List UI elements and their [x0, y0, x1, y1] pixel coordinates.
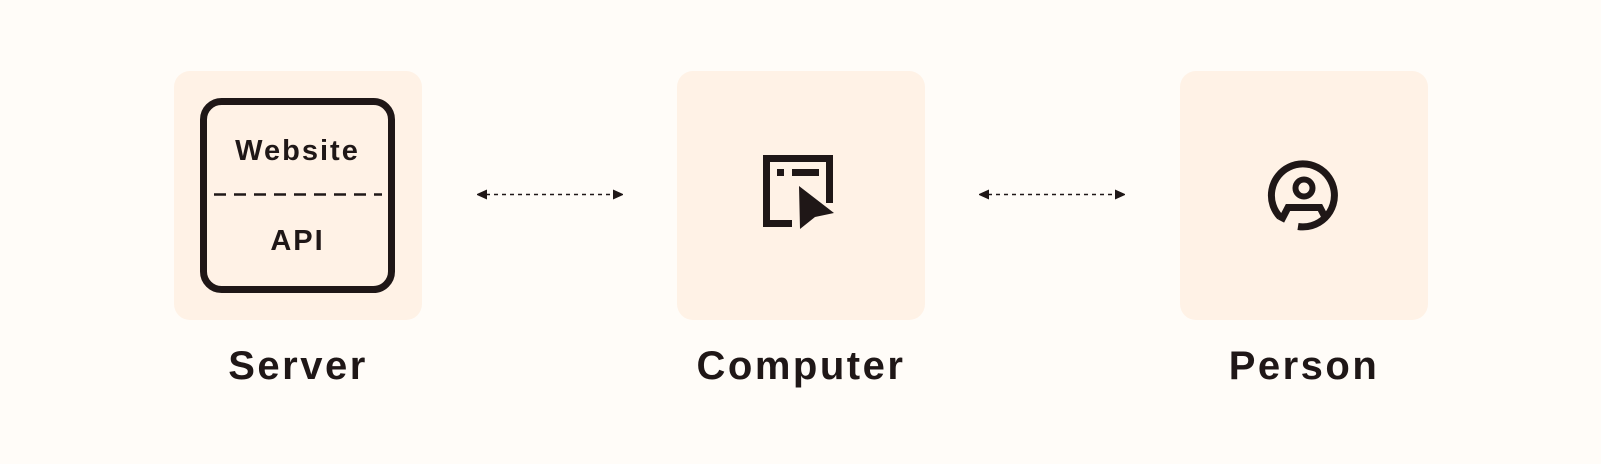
panel: person [1180, 71, 1428, 320]
arrow: computer-person [980, 194, 1124, 196]
panel: server [174, 71, 422, 320]
arrow: server-computer [478, 194, 622, 196]
label: Computer: Computer [697, 344, 905, 388]
icon: computer cursor [763, 155, 834, 229]
icon: person [1271, 164, 1334, 227]
label: Person: Person [1229, 344, 1379, 388]
text: API: API [270, 225, 325, 257]
text: Website: Website [235, 135, 360, 167]
label: Server: Server [228, 344, 368, 388]
server box [204, 102, 392, 290]
panel: computer [677, 71, 925, 320]
